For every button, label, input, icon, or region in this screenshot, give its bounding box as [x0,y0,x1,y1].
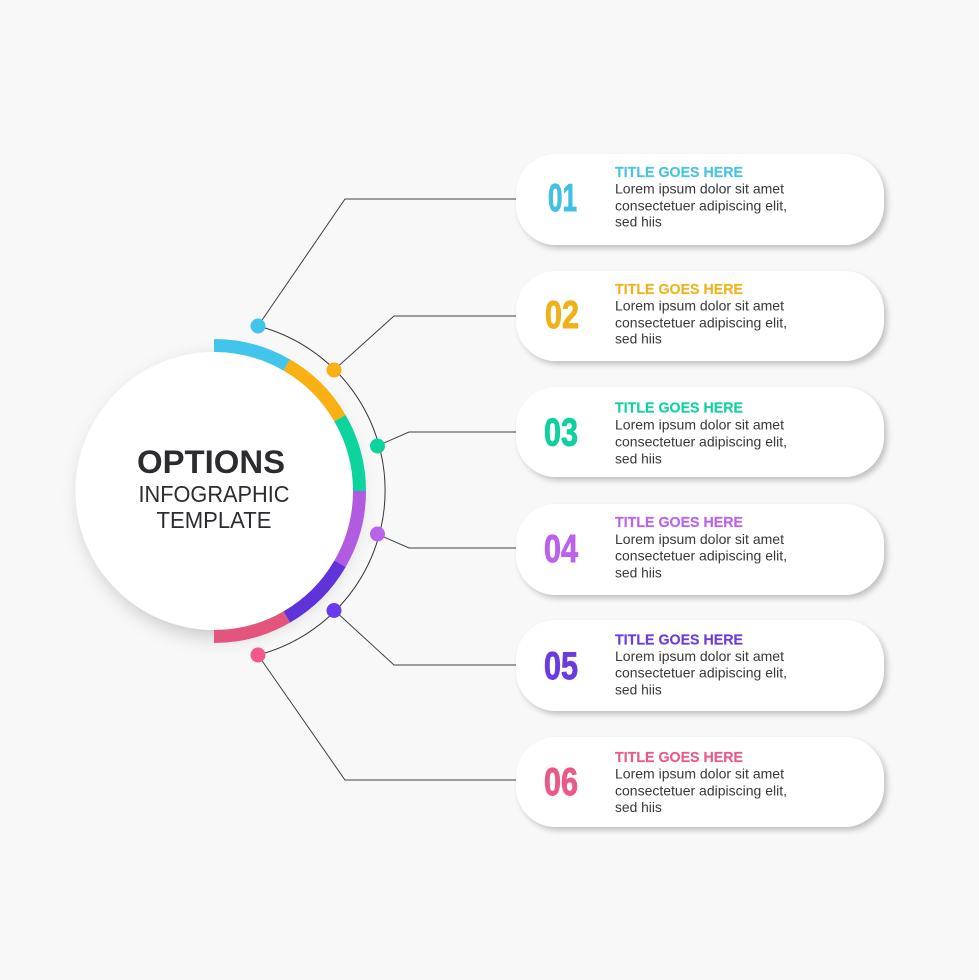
card 03: TITLE GOES HERE [615,400,743,416]
outer thin arc [258,326,385,655]
card 01: TITLE GOES HERE [615,165,743,181]
connector lines [258,199,516,780]
card 05: Lorem ipsum dolor sit amet [615,649,784,664]
card 01: Lorem ipsum dolor sit amet [615,182,784,196]
card 04 [516,504,884,595]
card 03: sed hiis [615,452,662,466]
card 03: Lorem ipsum dolor sit amet [615,418,784,432]
card 02: 02 [545,294,579,337]
card 03: 03 [544,412,578,454]
card 05: sed hiis [615,682,662,698]
card 03: consectetuer adipiscing elit, [615,434,787,450]
card 01: consectetuer adipiscing elit, [615,198,787,214]
centre heading: TEMPLATE [156,507,272,533]
card 04: sed hiis [615,566,662,580]
card 02: Lorem ipsum dolor sit amet [615,298,784,314]
card 03 [516,387,884,477]
card 04: 04 [544,528,578,571]
card 06: consectetuer adipiscing elit, [615,784,787,798]
card 02: sed hiis [615,332,662,346]
segmented colour ring [214,346,360,636]
centre heading: INFOGRAPHIC [138,481,290,507]
card 05: consectetuer adipiscing elit, [615,666,787,680]
card 02 [516,271,884,361]
card 02: TITLE GOES HERE [615,282,743,298]
card 01: sed hiis [615,214,662,230]
card 05: TITLE GOES HERE [615,632,743,648]
card 02: consectetuer adipiscing elit, [615,316,787,330]
connector dots [250,318,385,662]
card 06: sed hiis [615,800,662,815]
card 04: consectetuer adipiscing elit, [615,548,787,564]
card 06: Lorem ipsum dolor sit amet [615,766,784,782]
card 06 [516,737,884,827]
card 06: 06 [544,761,578,804]
card 06: TITLE GOES HERE [615,750,743,766]
card 01: 01 [548,177,577,220]
central white circle [76,352,354,630]
card 05: 05 [544,645,578,688]
card 01 [516,154,884,245]
centre heading [137,444,290,533]
card 04: Lorem ipsum dolor sit amet [615,532,784,547]
card 05 [516,620,884,711]
centre heading: OPTIONS [137,444,285,480]
card 04: TITLE GOES HERE [615,515,743,531]
